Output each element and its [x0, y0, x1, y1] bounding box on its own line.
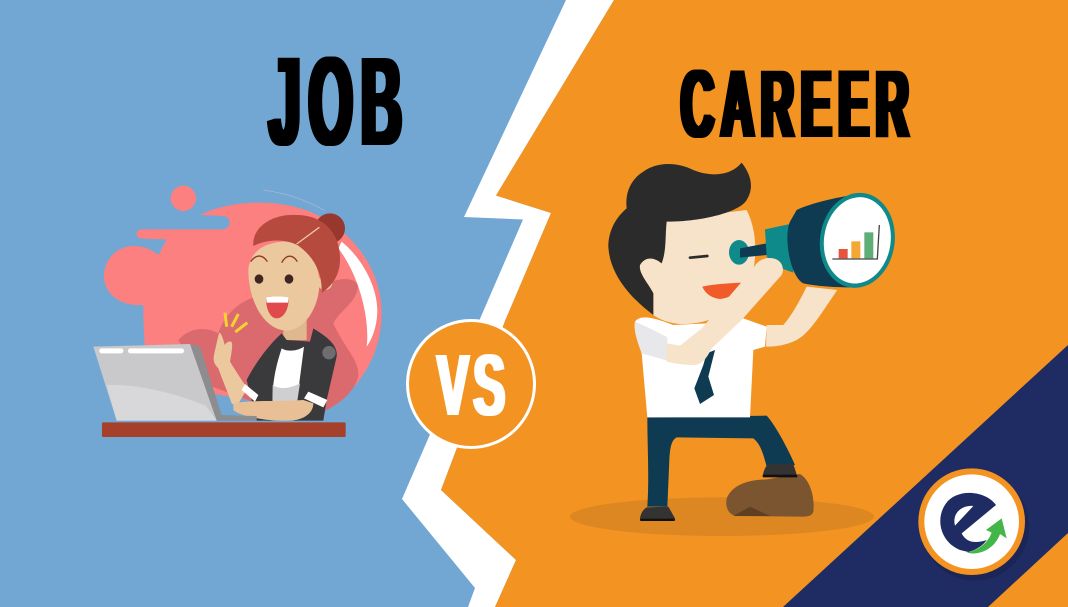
title: JOB: JOB	[269, 32, 410, 172]
logo counter	[954, 506, 973, 526]
white zigzag divider	[402, 0, 614, 607]
ground shadow	[570, 497, 874, 536]
desk	[102, 422, 346, 437]
head	[608, 163, 755, 324]
telescope	[729, 188, 901, 293]
shoes	[640, 464, 797, 521]
logo badge	[918, 468, 1029, 581]
shirt and tie	[635, 317, 767, 417]
rock	[726, 474, 814, 517]
panel: career orange background	[441, 0, 1068, 607]
trousers	[647, 416, 795, 507]
logo letter e	[940, 493, 996, 552]
pink blob background	[104, 186, 382, 412]
navy diagonal band	[783, 345, 1068, 607]
logo green arrow	[967, 518, 1007, 553]
front arm	[667, 258, 783, 365]
woman figure	[214, 213, 345, 421]
VS badge	[408, 320, 534, 448]
laptop	[93, 344, 257, 421]
illustration: woman at laptop	[93, 186, 382, 437]
title: CAREER: CAREER	[681, 50, 916, 159]
illustration: man with telescope	[570, 163, 901, 536]
VS badge: VS	[437, 336, 510, 434]
back arm	[766, 287, 837, 347]
